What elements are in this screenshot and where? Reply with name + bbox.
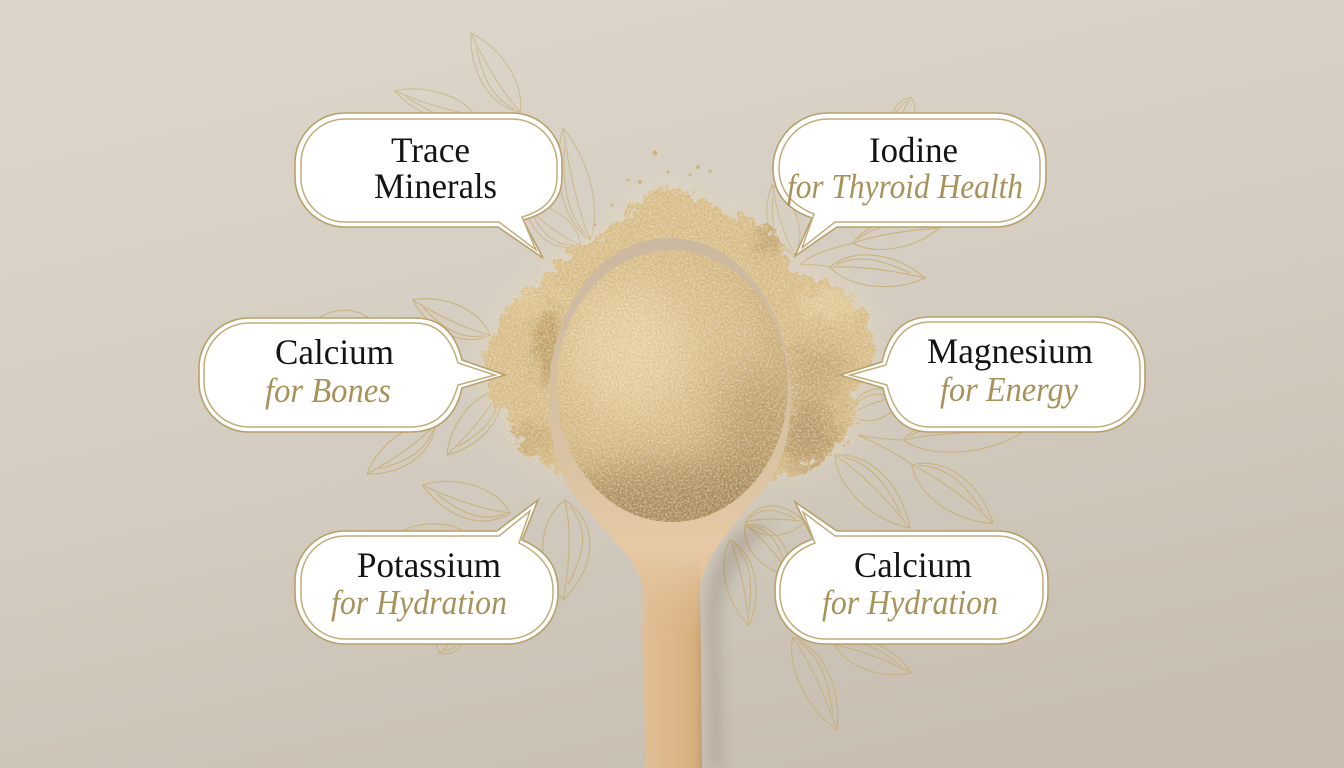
- callout: Potassium for Hydration: for Hydration: [331, 583, 507, 622]
- callout: Magnesium for Energy: for Energy: [940, 370, 1078, 409]
- botanical line-art leaves, remaining sprays: [317, 213, 1023, 736]
- callout: Calcium for Bones: [199, 318, 505, 432]
- callout: Calcium for Bones: for Bones: [265, 371, 391, 410]
- callout: Trace Minerals: Minerals: [374, 166, 497, 206]
- callout: Potassium for Hydration: Potassium: [357, 545, 501, 585]
- callout: Trace Minerals: Trace: [391, 130, 470, 170]
- loose powder halo: [475, 178, 883, 484]
- powder pile: [484, 188, 873, 476]
- wooden spoon: [549, 238, 791, 768]
- callout: Magnesium for Energy: [840, 317, 1145, 432]
- callout: Calcium for Hydration: for Hydration: [822, 583, 998, 622]
- callout: Trace Minerals: [295, 113, 562, 258]
- callout: Magnesium for Energy: Magnesium: [927, 331, 1093, 371]
- callout: Potassium for Hydration: [295, 500, 558, 644]
- callout: Calcium for Hydration: [775, 502, 1048, 644]
- stray powder specks: [594, 150, 712, 226]
- botanical line-art leaves, upper left: [391, 26, 920, 260]
- callout: Iodine for Thyroid Health: Iodine: [869, 130, 958, 170]
- spoon shadow: [706, 520, 775, 768]
- callout: Calcium for Hydration: Calcium: [854, 545, 972, 585]
- callout: Calcium for Bones: Calcium: [275, 332, 394, 372]
- callout: Iodine for Thyroid Health: [773, 113, 1046, 256]
- powder in spoon bowl: [556, 250, 788, 522]
- callout: Iodine for Thyroid Health: for Thyroid Health: [787, 167, 1023, 206]
